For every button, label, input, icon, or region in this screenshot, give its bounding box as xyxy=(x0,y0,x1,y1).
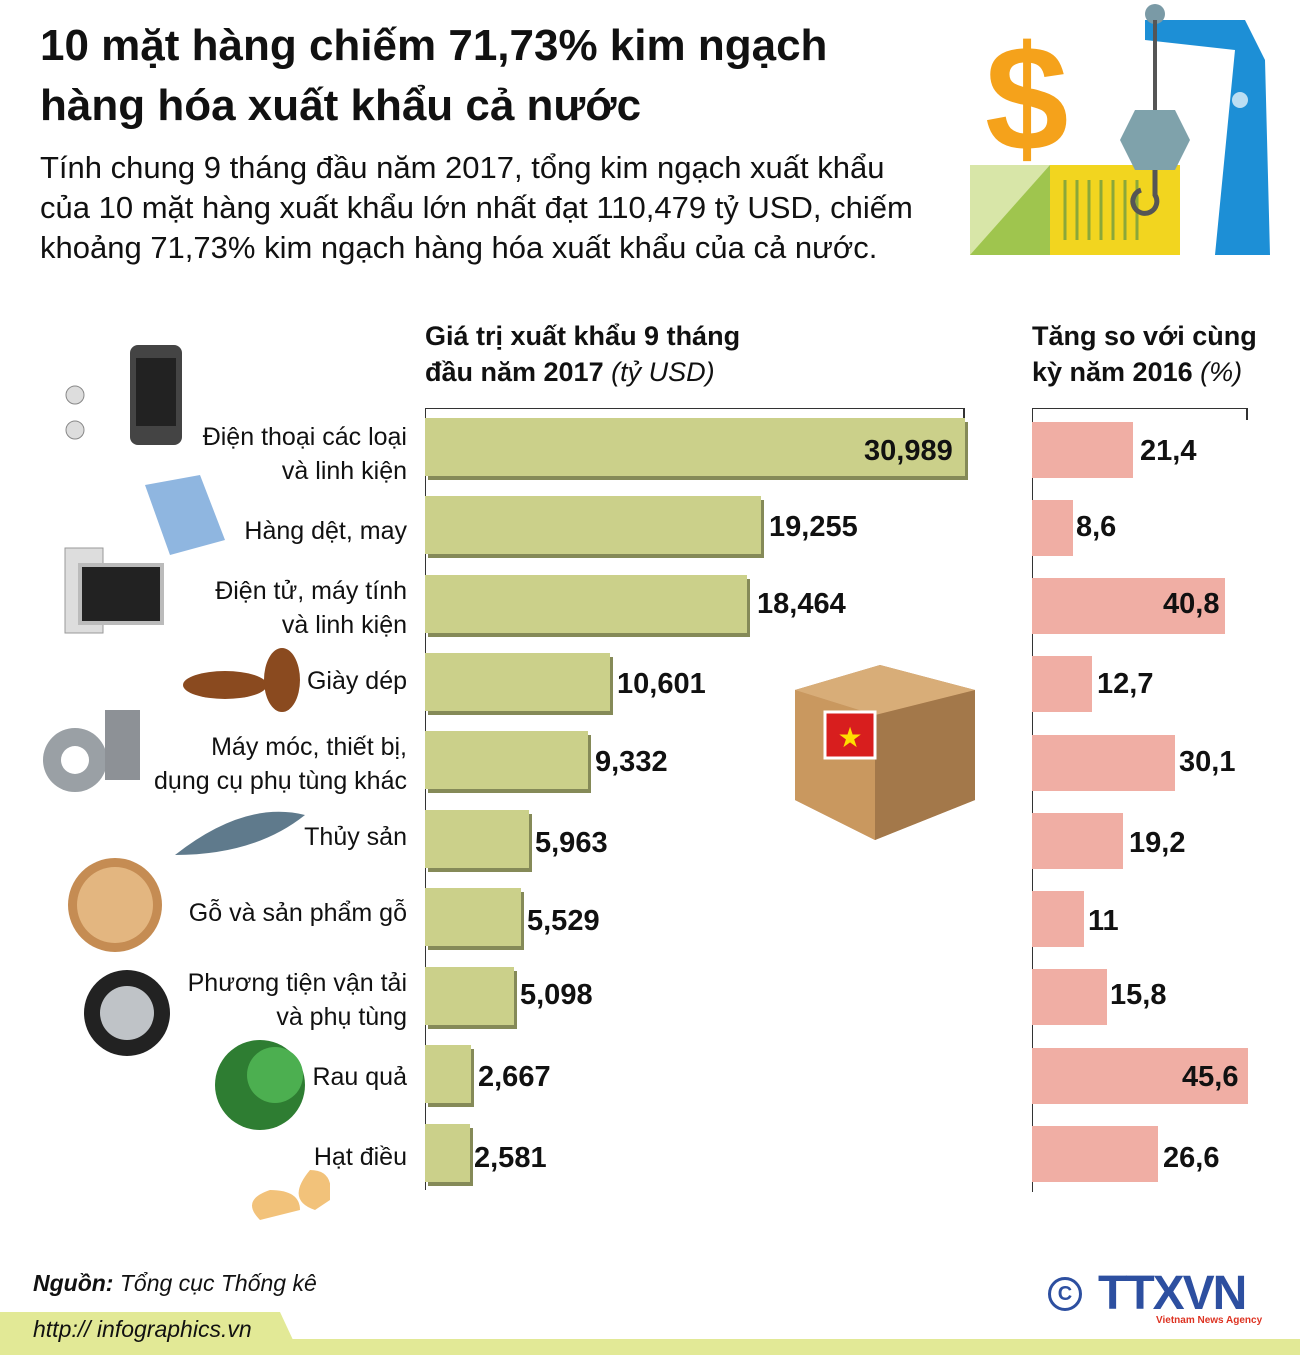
title xyxy=(40,21,827,130)
bar chart: growth: 8,6 xyxy=(1076,511,1116,543)
bar chart: export value: 2,667 xyxy=(478,1061,551,1093)
category labels: Thủy sản xyxy=(304,823,407,851)
heading: growth: kỳ năm 2016 (%) xyxy=(1032,357,1242,387)
bar chart: export value: 2,581 xyxy=(474,1142,547,1174)
icon: box with Vietnam flag: ★ xyxy=(837,722,863,753)
url: http:// infographics.vn xyxy=(33,1316,252,1342)
bar chart: export value: 5,529 xyxy=(527,905,600,937)
footer band xyxy=(0,1312,292,1339)
category labels: Giày dép xyxy=(307,667,407,695)
category labels: Điện tử, máy tính xyxy=(215,577,407,605)
bar chart: growth: 19,2 xyxy=(1129,827,1185,859)
category labels: Hàng dệt, may xyxy=(244,517,407,545)
bar chart: export value: 19,255 xyxy=(769,511,858,543)
logo TTXVN: C xyxy=(1058,1283,1072,1305)
bar chart: export value: 10,601 xyxy=(617,668,706,700)
bar chart: growth: 40,8 xyxy=(1163,588,1219,620)
bar chart: growth: 30,1 xyxy=(1179,746,1235,778)
category labels: Rau quả xyxy=(312,1063,407,1091)
category labels: Gỗ và sản phẩm gỗ xyxy=(189,899,407,927)
heading: export value: đầu năm 2017 (tỷ USD) xyxy=(425,357,715,387)
bar chart: growth: 11 xyxy=(1088,905,1119,937)
category labels: Máy móc, thiết bị, xyxy=(211,733,407,761)
bar chart: export value xyxy=(425,418,968,1186)
bar chart: export value: 18,464 xyxy=(757,588,846,620)
bar chart: growth: 12,7 xyxy=(1097,668,1153,700)
bar chart: growth: 15,8 xyxy=(1110,979,1166,1011)
intro text: của 10 mặt hàng xuất khẩu lớn nhất đạt 110,479 tỷ USD, chiếm xyxy=(40,190,913,225)
category icons xyxy=(43,345,330,1220)
intro text xyxy=(40,150,913,265)
category labels: và linh kiện xyxy=(282,611,407,639)
bar chart: export value: 5,963 xyxy=(535,827,608,859)
heading: export value xyxy=(425,321,740,387)
icon: dollar crane container xyxy=(970,4,1270,255)
title: 10 mặt hàng chiếm 71,73% kim ngạch xyxy=(40,21,827,70)
icon: box with Vietnam flag xyxy=(795,665,975,840)
logo TTXVN xyxy=(1048,1267,1262,1326)
source: Nguồn: Tổng cục Thống kê xyxy=(33,1270,317,1296)
bar chart: export value: 30,989 xyxy=(864,435,953,467)
category labels: Phương tiện vận tải xyxy=(188,969,407,997)
heading: growth: Tăng so với cùng xyxy=(1032,321,1257,351)
bar chart: growth: 26,6 xyxy=(1163,1142,1219,1174)
logo TTXVN: Vietnam News Agency xyxy=(1156,1315,1262,1326)
bar chart: growth xyxy=(1032,422,1248,1182)
category labels: và phụ tùng xyxy=(276,1003,407,1031)
bar chart: growth: 21,4 xyxy=(1140,435,1196,467)
bar chart: export value: 5,098 xyxy=(520,979,593,1011)
title: hàng hóa xuất khẩu cả nước xyxy=(40,81,641,130)
category labels: Điện thoại các loại xyxy=(203,423,407,451)
heading: export value: Giá trị xuất khẩu 9 tháng xyxy=(425,321,740,351)
chart frames xyxy=(425,408,965,1190)
intro text: Tính chung 9 tháng đầu năm 2017, tổng kim ngạch xuất khẩu xyxy=(40,150,884,185)
bar chart: growth: 45,6 xyxy=(1182,1061,1238,1093)
category labels: và linh kiện xyxy=(282,457,407,485)
category labels: dụng cụ phụ tùng khác xyxy=(154,767,407,795)
heading: growth xyxy=(1032,321,1257,387)
icon: dollar crane container: $ xyxy=(985,14,1068,182)
logo TTXVN: TTXVN xyxy=(1098,1267,1245,1320)
intro text: khoảng 71,73% kim ngạch hàng hóa xuất khẩu của cả nước. xyxy=(40,230,877,265)
bar chart: export value: 9,332 xyxy=(595,746,668,778)
category labels: Hạt điều xyxy=(314,1143,407,1171)
category labels xyxy=(154,423,408,1171)
